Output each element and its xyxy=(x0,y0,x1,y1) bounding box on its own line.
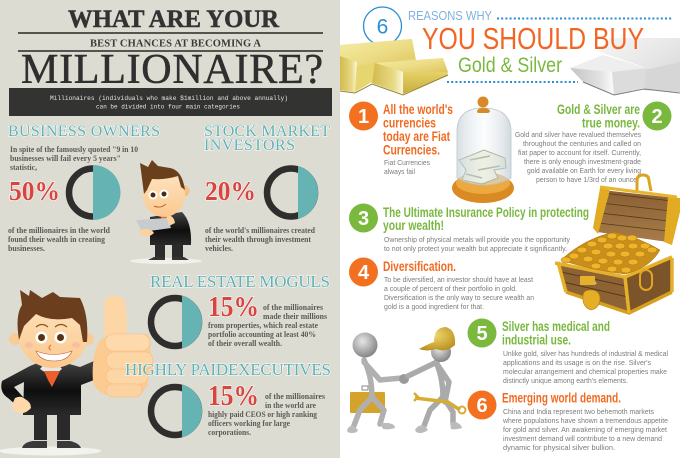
body: for gold and silver. An awakening of emerging market xyxy=(503,425,668,434)
heading: currencies xyxy=(383,116,436,130)
donut chart 20% xyxy=(267,166,318,219)
illustration: treasure chest xyxy=(555,175,680,313)
description xyxy=(208,391,326,437)
description: portfolio accounting at least 40% xyxy=(208,329,316,339)
reason 4 xyxy=(349,258,534,311)
chest handle xyxy=(637,175,651,191)
heading: industrial use. xyxy=(502,332,571,348)
illustration: businessman with tablet xyxy=(130,160,202,264)
description: of their overall wealth. xyxy=(208,338,282,348)
number six badge xyxy=(364,7,402,45)
heading: true money. xyxy=(582,116,640,130)
number six badge: 6 xyxy=(377,16,388,38)
stat 15%: 15% xyxy=(208,291,259,323)
description: of the millionaires xyxy=(265,391,326,401)
description: highly paid CEOS or high ranking xyxy=(208,409,318,419)
title line one: WHAT ARE YOUR xyxy=(68,4,280,33)
intro banner: can be divided into four main categories xyxy=(96,104,240,110)
heading: Silver has medical and xyxy=(502,319,610,334)
badge 3: 3 xyxy=(358,208,369,230)
description: of the millionaires in the world xyxy=(8,225,110,235)
description: made their millions xyxy=(263,311,328,321)
body: always fail xyxy=(384,167,415,176)
body: distinctly unique among earth's elements. xyxy=(503,376,628,385)
dotted rule bottom xyxy=(447,81,578,83)
badge 5 xyxy=(468,318,496,348)
body xyxy=(384,235,570,253)
heading: Gold & Silver are xyxy=(557,102,640,117)
reasons why: REASONS WHY xyxy=(408,8,492,23)
heading: INVESTORS xyxy=(204,137,295,154)
heading: Emerging world demand. xyxy=(502,390,621,406)
body: there is only enough investment-grade xyxy=(524,157,641,166)
body: To be diversified, an investor should have at least xyxy=(384,275,534,284)
body: fiat paper to account for itself. Currently, xyxy=(518,148,641,157)
heading: Diversification. xyxy=(383,259,456,274)
panel: six reasons to buy gold and silver xyxy=(340,0,680,458)
stat 20%: 20% xyxy=(205,176,256,206)
description: found their wealth in creating xyxy=(8,234,106,244)
chest lid xyxy=(597,190,675,242)
gold and silver subhead: Gold & Silver xyxy=(458,54,562,77)
body: Ownership of physical metals will provide you the opportunity xyxy=(384,235,570,244)
intro banner xyxy=(9,88,332,116)
badge 6: 6 xyxy=(476,395,488,417)
heading: HIGHLY PAIDEXECUTIVES xyxy=(125,360,331,379)
body: molecular arrangement and chemical properties make xyxy=(503,367,667,376)
body: Diversification is the only way to secure wealth an xyxy=(384,293,534,302)
badge 6 xyxy=(468,390,496,420)
description: of the millionaires xyxy=(263,302,324,312)
body: a couple of percent of their portfolio in gold. xyxy=(384,284,517,293)
section: stock market investors xyxy=(204,123,330,253)
illustration: silver figures shaking hands xyxy=(347,327,466,433)
body xyxy=(384,275,534,311)
badge 2: 2 xyxy=(651,106,663,128)
section: highly paid executives xyxy=(125,360,331,438)
description xyxy=(205,225,315,253)
heading: The Ultimate Insurance Policy in protecting xyxy=(383,205,589,220)
coin pile xyxy=(561,232,660,274)
heading: BUSINESS OWNERS xyxy=(8,123,160,140)
body: throughout the centuries and called on xyxy=(523,139,641,148)
description xyxy=(8,225,110,253)
section: real estate moguls xyxy=(150,272,330,348)
body: investment demand will contribute to a new demand xyxy=(503,434,662,443)
description: officers working for large xyxy=(208,418,290,428)
description: from properties, which real estate xyxy=(208,320,318,330)
reason 2 xyxy=(515,102,672,184)
body xyxy=(502,407,668,452)
panel: what are your chances xyxy=(0,0,340,458)
badge 4: 4 xyxy=(358,262,370,284)
title line two: BEST CHANCES AT BECOMING A xyxy=(90,38,261,50)
panel background xyxy=(0,0,340,458)
section: business owners xyxy=(8,123,160,253)
body xyxy=(503,349,668,385)
intro text xyxy=(10,144,139,172)
description: their wealth through investment xyxy=(205,234,311,244)
heading xyxy=(204,123,330,154)
heading: today are Fiat xyxy=(383,129,450,144)
heading xyxy=(383,102,453,158)
heading xyxy=(383,205,589,233)
reason 5 xyxy=(468,318,668,385)
body: applications and its usage is on the rise. Silver's xyxy=(503,358,651,367)
reason 3 xyxy=(349,204,589,253)
description xyxy=(208,302,328,348)
intro text: statistic, xyxy=(10,162,37,172)
header xyxy=(340,7,680,95)
reason 6 xyxy=(468,390,668,452)
body: Gold and silver have revalued themselves xyxy=(515,130,641,139)
heading: STOCK MARKET xyxy=(204,123,330,140)
body xyxy=(384,158,430,176)
heading xyxy=(557,102,640,130)
body: Fiat Currencies xyxy=(384,158,430,167)
donut chart 15% xyxy=(151,296,202,348)
stat 15%: 15% xyxy=(208,380,259,412)
body: China and India represent two behemoth markets xyxy=(503,407,654,416)
chest body xyxy=(558,258,672,313)
gold bars xyxy=(340,39,448,95)
body: person to have 1/3rd of an ounce xyxy=(536,175,637,184)
badge 1: 1 xyxy=(358,106,369,128)
illustration: businessman thumbs up xyxy=(0,290,153,456)
body: gold is a good ingredient for that. xyxy=(384,302,484,311)
description: vehicles. xyxy=(205,243,233,253)
donut chart 50% xyxy=(69,165,120,220)
rule below subtitle xyxy=(18,50,323,52)
body: dynamic for physical silver bullion. xyxy=(503,443,615,452)
badge 5: 5 xyxy=(476,323,488,345)
heading: All the world's xyxy=(383,102,453,117)
body: to not only protect your wealth but appreciate it significantly. xyxy=(384,244,567,253)
illustration: money under glass bell xyxy=(452,96,514,203)
description: businesses. xyxy=(8,243,45,253)
dotted rule top xyxy=(497,18,672,20)
donut chart 15% xyxy=(151,384,202,438)
stat 50%: 50% xyxy=(9,176,60,206)
silver bars xyxy=(570,38,680,95)
badge 3 xyxy=(349,204,378,232)
panel background xyxy=(340,0,680,458)
heading: your wealth! xyxy=(383,218,444,233)
rule above subtitle xyxy=(18,32,323,34)
title line three: MILLIONAIRE? xyxy=(21,47,323,93)
body xyxy=(515,130,641,184)
reason 1 xyxy=(349,102,453,176)
intro text: businesses will fail every 5 years" xyxy=(10,153,121,163)
heading: REAL ESTATE MOGULS xyxy=(150,272,330,291)
intro text: In spite of the famously quoted "9 in 10 xyxy=(10,144,139,154)
figure with wrench and cap xyxy=(408,327,466,433)
body: gold available on Earth for every living xyxy=(527,166,641,175)
heading xyxy=(502,319,610,348)
description: of the world's millionaires created xyxy=(205,225,315,235)
badge 2 xyxy=(642,102,672,130)
description: corporations. xyxy=(208,427,251,437)
lock xyxy=(585,280,596,285)
heading: Currencies. xyxy=(383,142,440,158)
description: in the world are xyxy=(265,400,316,410)
intro banner: Millionaires (individuals who make $1million and above annually) xyxy=(50,95,288,102)
body: where populations have shown a tremendous appetite xyxy=(502,416,668,425)
figure with briefcase xyxy=(347,332,409,433)
badge 4 xyxy=(349,258,378,286)
